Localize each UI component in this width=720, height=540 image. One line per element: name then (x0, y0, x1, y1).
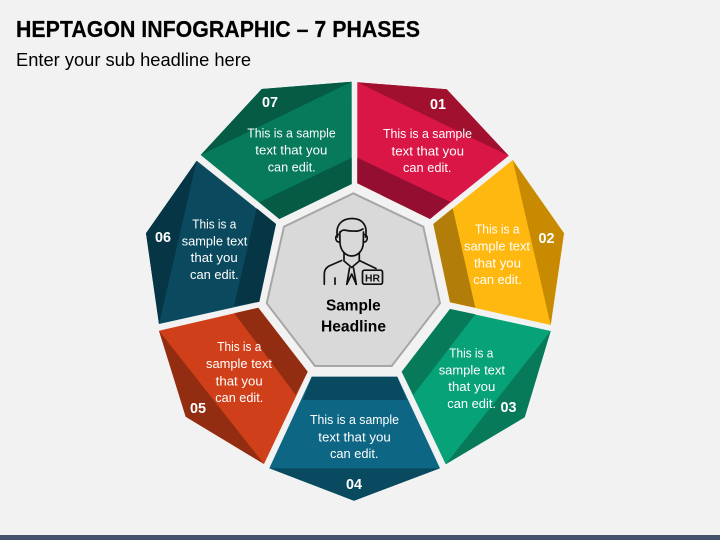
text block 01: can edit. (403, 160, 452, 175)
center headline: Sample (326, 298, 381, 315)
text block 05 (206, 339, 272, 405)
text block 02: sample text (464, 238, 530, 254)
center heptagon shape (267, 193, 440, 366)
text block 03: can edit. (447, 396, 496, 411)
text block 05: This is a (217, 339, 262, 354)
panel: phase 05 (159, 308, 308, 464)
icon: HR person (324, 218, 382, 284)
text block 06: that you (191, 250, 238, 265)
text block 01: This is a sample (383, 126, 472, 141)
text block 07: can edit. (268, 159, 316, 174)
text block 05: can edit. (215, 390, 263, 405)
text block 05: that you (216, 373, 263, 388)
text block 04: This is a sample (310, 412, 399, 427)
text block 02: that you (474, 256, 521, 270)
text block 01: text that you (392, 144, 464, 158)
text block 07: This is a sample (247, 126, 336, 141)
text block 05: sample text (206, 356, 272, 371)
segment shape 05 (159, 308, 308, 464)
panel: phase 03 (402, 309, 551, 464)
text block 04: text that you (318, 429, 391, 444)
text block 06: This is a (192, 216, 237, 232)
number 07: 07 (262, 94, 278, 111)
center headline (321, 298, 386, 336)
segment shape 06 (146, 161, 276, 324)
text block 03: sample text (439, 362, 505, 378)
panel: phase 07 (201, 82, 352, 219)
footer bar (0, 535, 720, 540)
number 01: 01 (430, 96, 446, 113)
panel: phase 04 (269, 377, 440, 501)
number 04: 04 (346, 476, 363, 493)
text block 06 (182, 216, 248, 282)
text block 06: sample text (182, 234, 248, 248)
text block 06: can edit. (190, 267, 239, 282)
text block 07 (247, 126, 336, 174)
icon label: HR: HR (365, 272, 380, 284)
text block 03: that you (448, 379, 495, 394)
subtitle: Enter your sub headline here (16, 50, 251, 70)
segment shape 04 (269, 377, 440, 501)
number 05: 05 (190, 400, 206, 417)
segment shape 01 (357, 82, 509, 219)
text block 02: This is a (475, 222, 520, 236)
title: HEPTAGON INFOGRAPHIC – 7 PHASES (16, 16, 420, 42)
text block 02 (464, 222, 530, 287)
segment shape 02 (433, 160, 564, 325)
panel: phase 02 (433, 160, 564, 325)
text block 04: can edit. (330, 446, 378, 461)
panel: phase 06 (146, 161, 276, 324)
text block 02: can edit. (473, 272, 522, 287)
text block 03 (439, 346, 505, 411)
number 06: 06 (155, 229, 171, 246)
text block 01 (383, 126, 472, 175)
center headline: Headline (321, 319, 386, 336)
panel: center heptagon (267, 193, 440, 366)
panel: phase 01 (357, 82, 509, 219)
text block 07: text that you (255, 143, 327, 158)
number 02: 02 (538, 230, 554, 247)
text block 04 (310, 412, 399, 461)
number 03: 03 (500, 399, 516, 416)
text block 03: This is a (449, 346, 494, 360)
segment shape 03 (402, 309, 551, 464)
segment shape 07 (201, 82, 352, 219)
